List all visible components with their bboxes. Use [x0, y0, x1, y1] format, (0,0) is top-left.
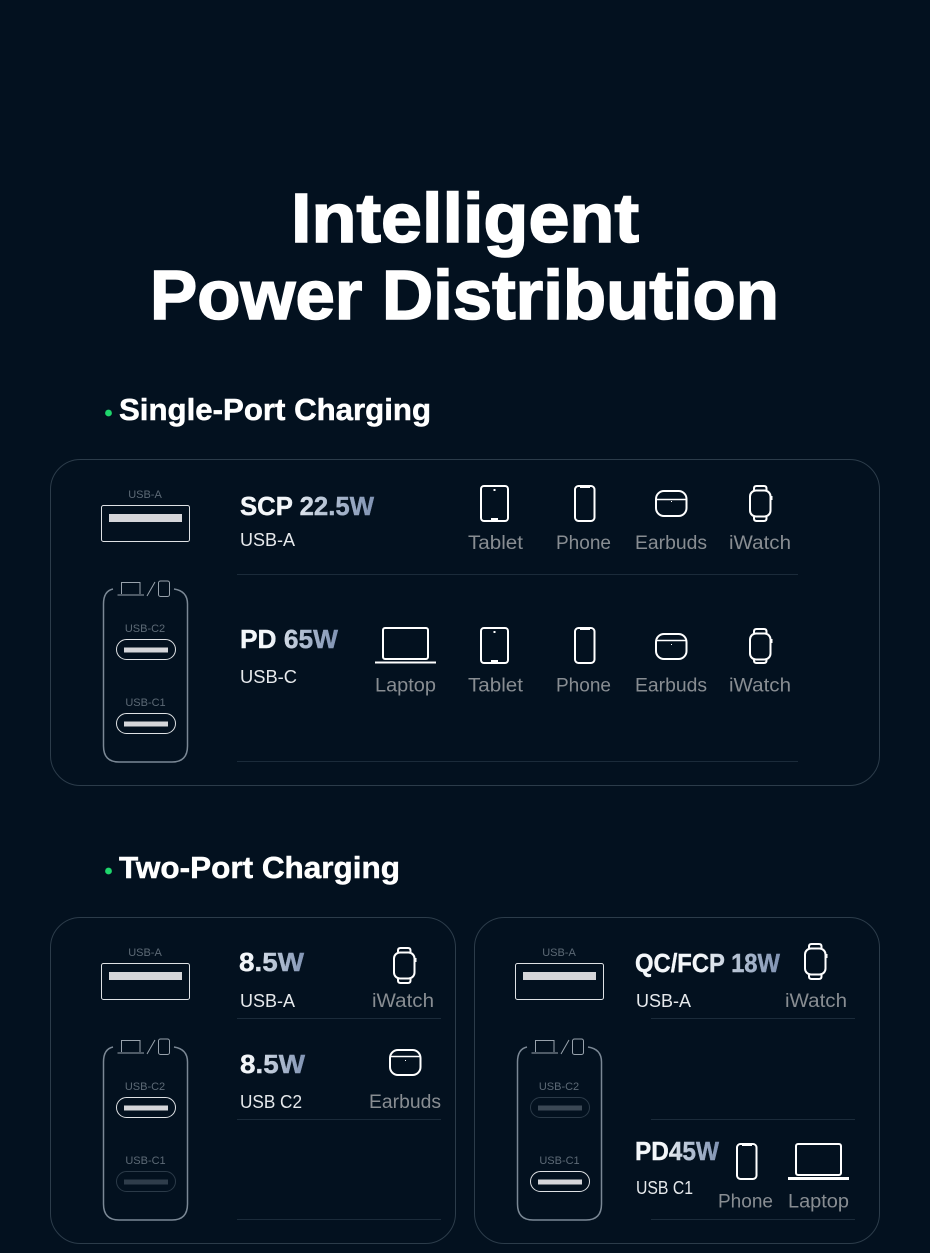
charger: USB-C1 active: USB-C1 [539, 1155, 580, 1167]
icon: watch [372, 948, 434, 1012]
row: QC/FCP 18W: USB-A [636, 991, 691, 1011]
port: USB-A [102, 489, 190, 542]
row: PD 65W: USB-C [240, 667, 297, 687]
charger: USB-C ports: USB-C2 [125, 623, 165, 635]
charger: USB-C ports: USB-C1 [125, 697, 166, 709]
icon: laptop [788, 1144, 849, 1212]
charger: USB-C2 active: USB-C2 [125, 1081, 165, 1093]
panel: USB-A and USB-C1 [474, 918, 880, 1244]
charger: USB-C2 active [104, 1039, 188, 1220]
icon: phone [556, 628, 611, 696]
row: 8.5W USB C2: USB C2 [240, 1092, 302, 1112]
heading: single-port charging: Single-Port Charging [119, 392, 431, 427]
icon: laptop: Laptop [788, 1192, 849, 1212]
icon: watch: iWatch [785, 991, 847, 1012]
panel: USB-A and USB-C2 [50, 918, 456, 1244]
title: Power Distribution [150, 256, 779, 334]
icon: earbuds: Earbuds [635, 676, 707, 696]
charger: USB-C ports [104, 581, 188, 762]
title: Intelligent [291, 179, 639, 257]
icon: phone [556, 486, 611, 554]
row: PD 65W: PD 65W [240, 624, 338, 654]
row: PD 65W [240, 624, 338, 687]
port: USB-A [516, 947, 604, 1000]
icon: watch [729, 629, 791, 696]
row: 8.5W USB-A: USB-A [240, 991, 295, 1011]
charger: USB-C1 active [518, 1039, 602, 1220]
icon: laptop: Laptop [375, 676, 436, 696]
icon: earbuds: Earbuds [635, 533, 707, 554]
icon: tablet: Tablet [468, 533, 524, 554]
icon: earbuds [635, 634, 707, 696]
icon: tablet [468, 628, 524, 696]
port: USB-A [102, 947, 190, 1000]
row: PD45W [635, 1136, 719, 1198]
icon: tablet [468, 486, 524, 554]
title [150, 179, 779, 334]
charger: USB-C2 active: USB-C1 [125, 1155, 166, 1167]
row: 8.5W USB C2: 8.5W [240, 1049, 305, 1079]
icon: watch [785, 944, 847, 1012]
port: USB-A: USB-A [128, 947, 162, 959]
port: USB-A: USB-A [128, 489, 162, 501]
row: QC/FCP 18W: QC/FCP 18W [635, 948, 780, 978]
icon: watch: iWatch [729, 533, 791, 554]
row: 8.5W USB-A: 8.5W [239, 947, 304, 977]
icon: laptop [375, 628, 436, 696]
row: PD45W: PD45W [635, 1136, 719, 1166]
icon: watch [729, 486, 791, 554]
icon: earbuds [369, 1050, 441, 1113]
icon: phone: Phone [718, 1192, 773, 1212]
row: SCP 22.5W [240, 491, 374, 550]
port: USB-A: USB-A [542, 947, 576, 959]
icon: phone: Phone [556, 533, 611, 554]
row: 8.5W USB C2 [240, 1049, 305, 1112]
icon: earbuds [635, 491, 707, 554]
row: PD45W: USB C1 [636, 1178, 693, 1198]
row: QC/FCP 18W [635, 948, 780, 1011]
charger: USB-C1 active: USB-C2 [539, 1081, 579, 1093]
icon: earbuds: Earbuds [369, 1092, 441, 1113]
icon: phone: Phone [556, 676, 611, 696]
panel: single-port charging [50, 460, 880, 786]
heading: two-port charging: Two-Port Charging [119, 850, 400, 885]
icon: phone [718, 1144, 773, 1212]
icon: tablet: Tablet [468, 676, 524, 696]
row: SCP 22.5W: SCP 22.5W [240, 491, 374, 521]
row: SCP 22.5W: USB-A [240, 530, 295, 550]
icon: watch: iWatch [729, 676, 791, 696]
icon: watch: iWatch [372, 991, 434, 1012]
row: 8.5W USB-A [239, 947, 304, 1011]
